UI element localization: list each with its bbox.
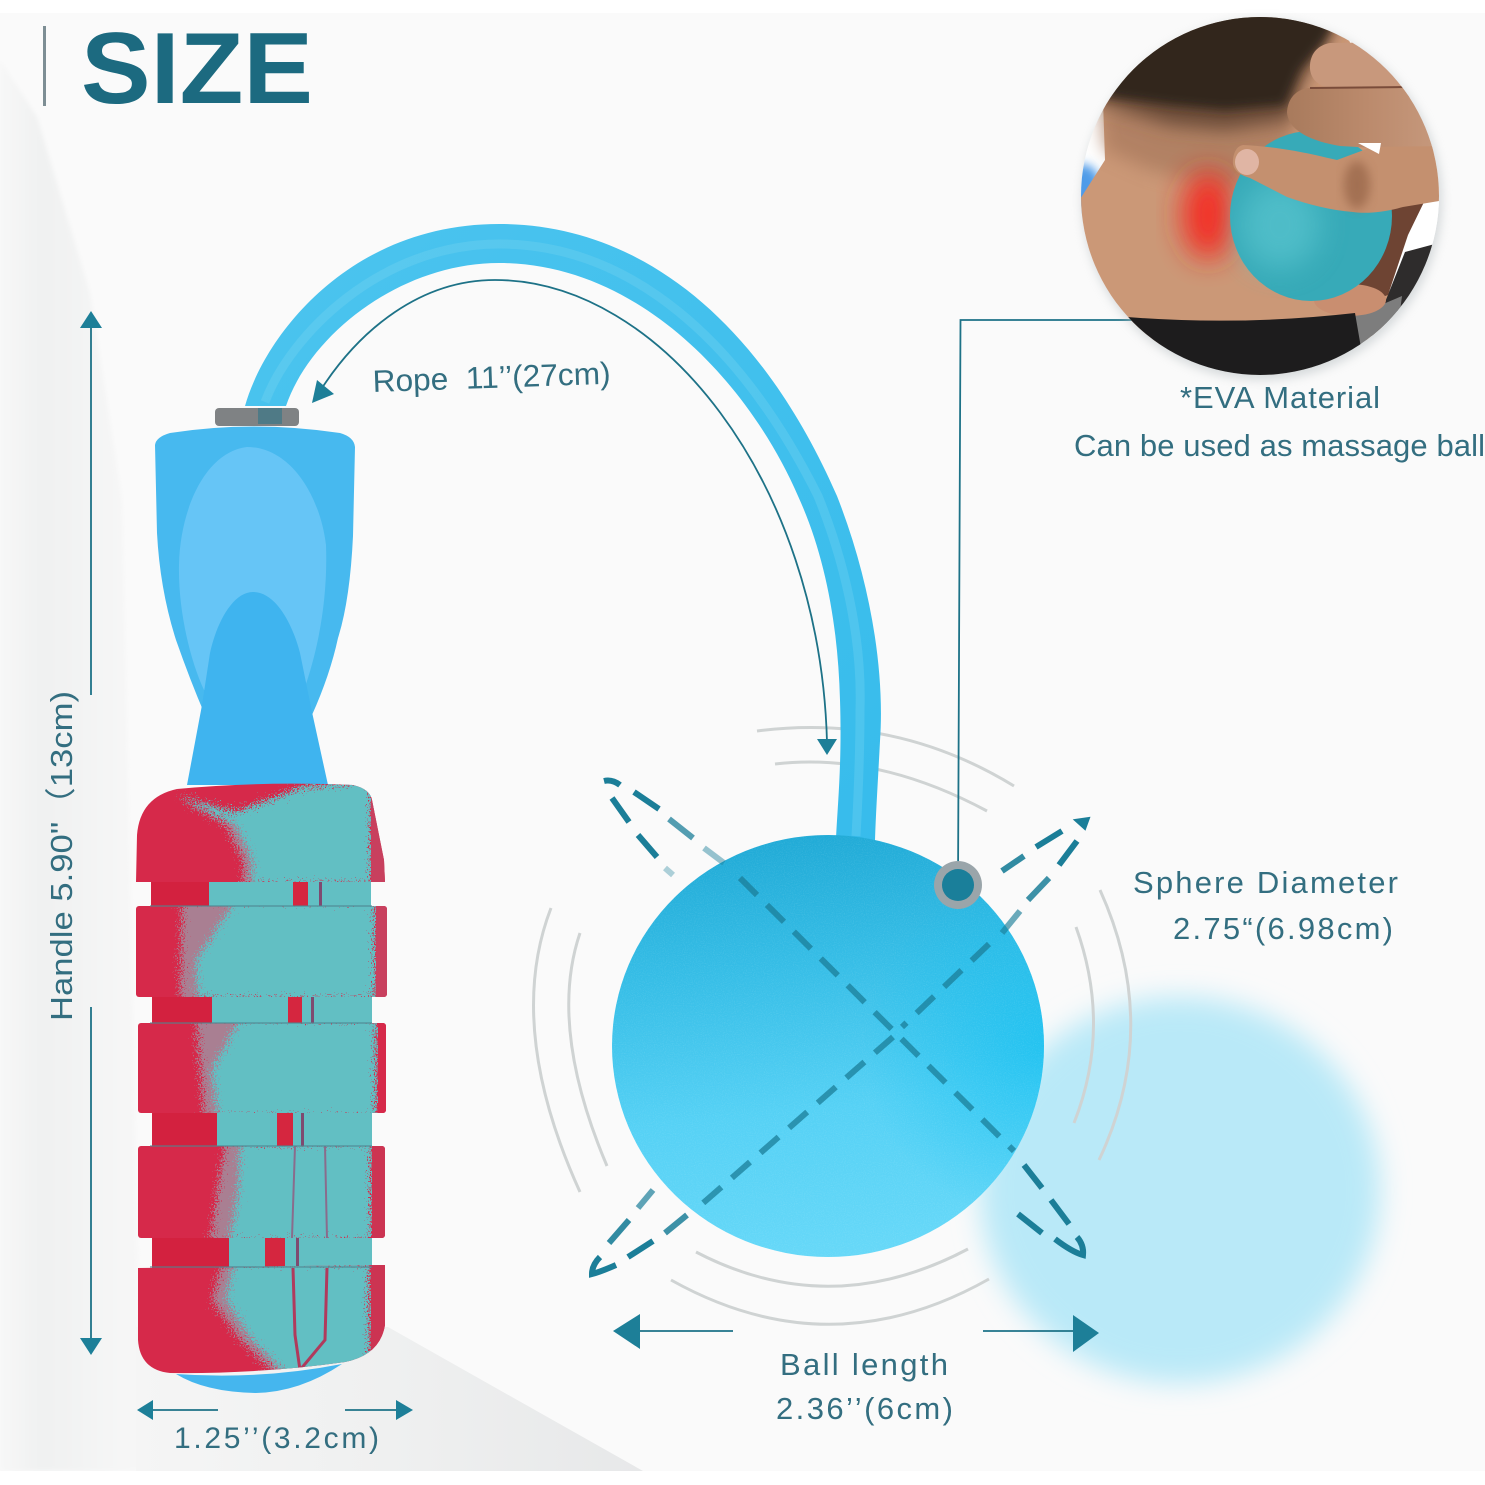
- sphere axis dashes: [592, 780, 1089, 1274]
- ball: [1230, 131, 1392, 301]
- skipping rope handle: [130, 408, 390, 1393]
- dark hand palm: [1358, 204, 1424, 296]
- foam grip: [130, 780, 390, 1378]
- ball length arrows: [613, 1314, 1099, 1352]
- ball length label: [776, 1347, 953, 1426]
- hair: [1090, 0, 1345, 130]
- foam segment 3: [138, 1023, 386, 1113]
- photo shadow: [1082, 20, 1442, 380]
- sphere diameter label: [1133, 865, 1398, 946]
- foam segment 1: [136, 784, 385, 882]
- callout line to photo: [958, 320, 1135, 885]
- motion arcs: [534, 727, 1131, 1324]
- left blue blur: [1081, 157, 1101, 218]
- neck upper shade: [1090, 108, 1297, 188]
- metal bolt: [215, 408, 299, 426]
- foam segment 5: [138, 1265, 385, 1374]
- cap oval facet: [179, 447, 326, 690]
- handle cap: [155, 426, 355, 715]
- material label: [1074, 380, 1485, 463]
- knuckle shade: [1344, 161, 1370, 209]
- finger gap line: [1310, 87, 1404, 88]
- handle neck: [187, 592, 328, 785]
- gap highlight: [1358, 143, 1381, 154]
- right side backdrop: [1390, 224, 1434, 291]
- front finger: [1233, 145, 1445, 213]
- neck skin: [1081, 27, 1390, 344]
- sphere diameter label: 2.75“(6.98cm): [1173, 911, 1393, 946]
- black collar: [1128, 313, 1360, 375]
- fingertip nail: [1235, 149, 1259, 175]
- foam joint shadows: [150, 906, 372, 1267]
- handle end cap: [176, 1364, 342, 1393]
- handle width dimension: 1.25’’(3.2cm): [174, 1422, 379, 1455]
- top finger: [1310, 42, 1410, 98]
- rope: [245, 224, 881, 840]
- callout dot: [934, 861, 982, 909]
- photo backdrop: [1084, 41, 1434, 375]
- middle finger: [1287, 88, 1445, 152]
- rope length arrow: [312, 280, 837, 755]
- ball length label: Ball length: [780, 1347, 948, 1382]
- lower fingertip: [1314, 284, 1386, 316]
- blurred ghost ball: [980, 997, 1380, 1383]
- handle width dimension: [137, 1400, 413, 1455]
- material label: Can be used as massage ball: [1074, 428, 1485, 463]
- title: SIZE: SIZE: [81, 13, 313, 125]
- handle height dimension: Handle 5.90"（13cm): [44, 691, 79, 1021]
- foam necks: [151, 880, 372, 1269]
- material label: *EVA Material: [1180, 380, 1380, 415]
- rope label: Rope 11’’(27cm): [372, 356, 611, 399]
- massage ball: [612, 835, 1044, 1257]
- ball length label: 2.36’’(6cm): [776, 1391, 953, 1426]
- foam segment 4: [138, 1146, 385, 1238]
- sphere diameter label: Sphere Diameter: [1133, 865, 1398, 900]
- foam segment 2: [136, 906, 387, 997]
- red pain spot: [1182, 171, 1234, 259]
- photo: neck massage: [1078, 16, 1446, 384]
- handle height dimension: [44, 311, 102, 1355]
